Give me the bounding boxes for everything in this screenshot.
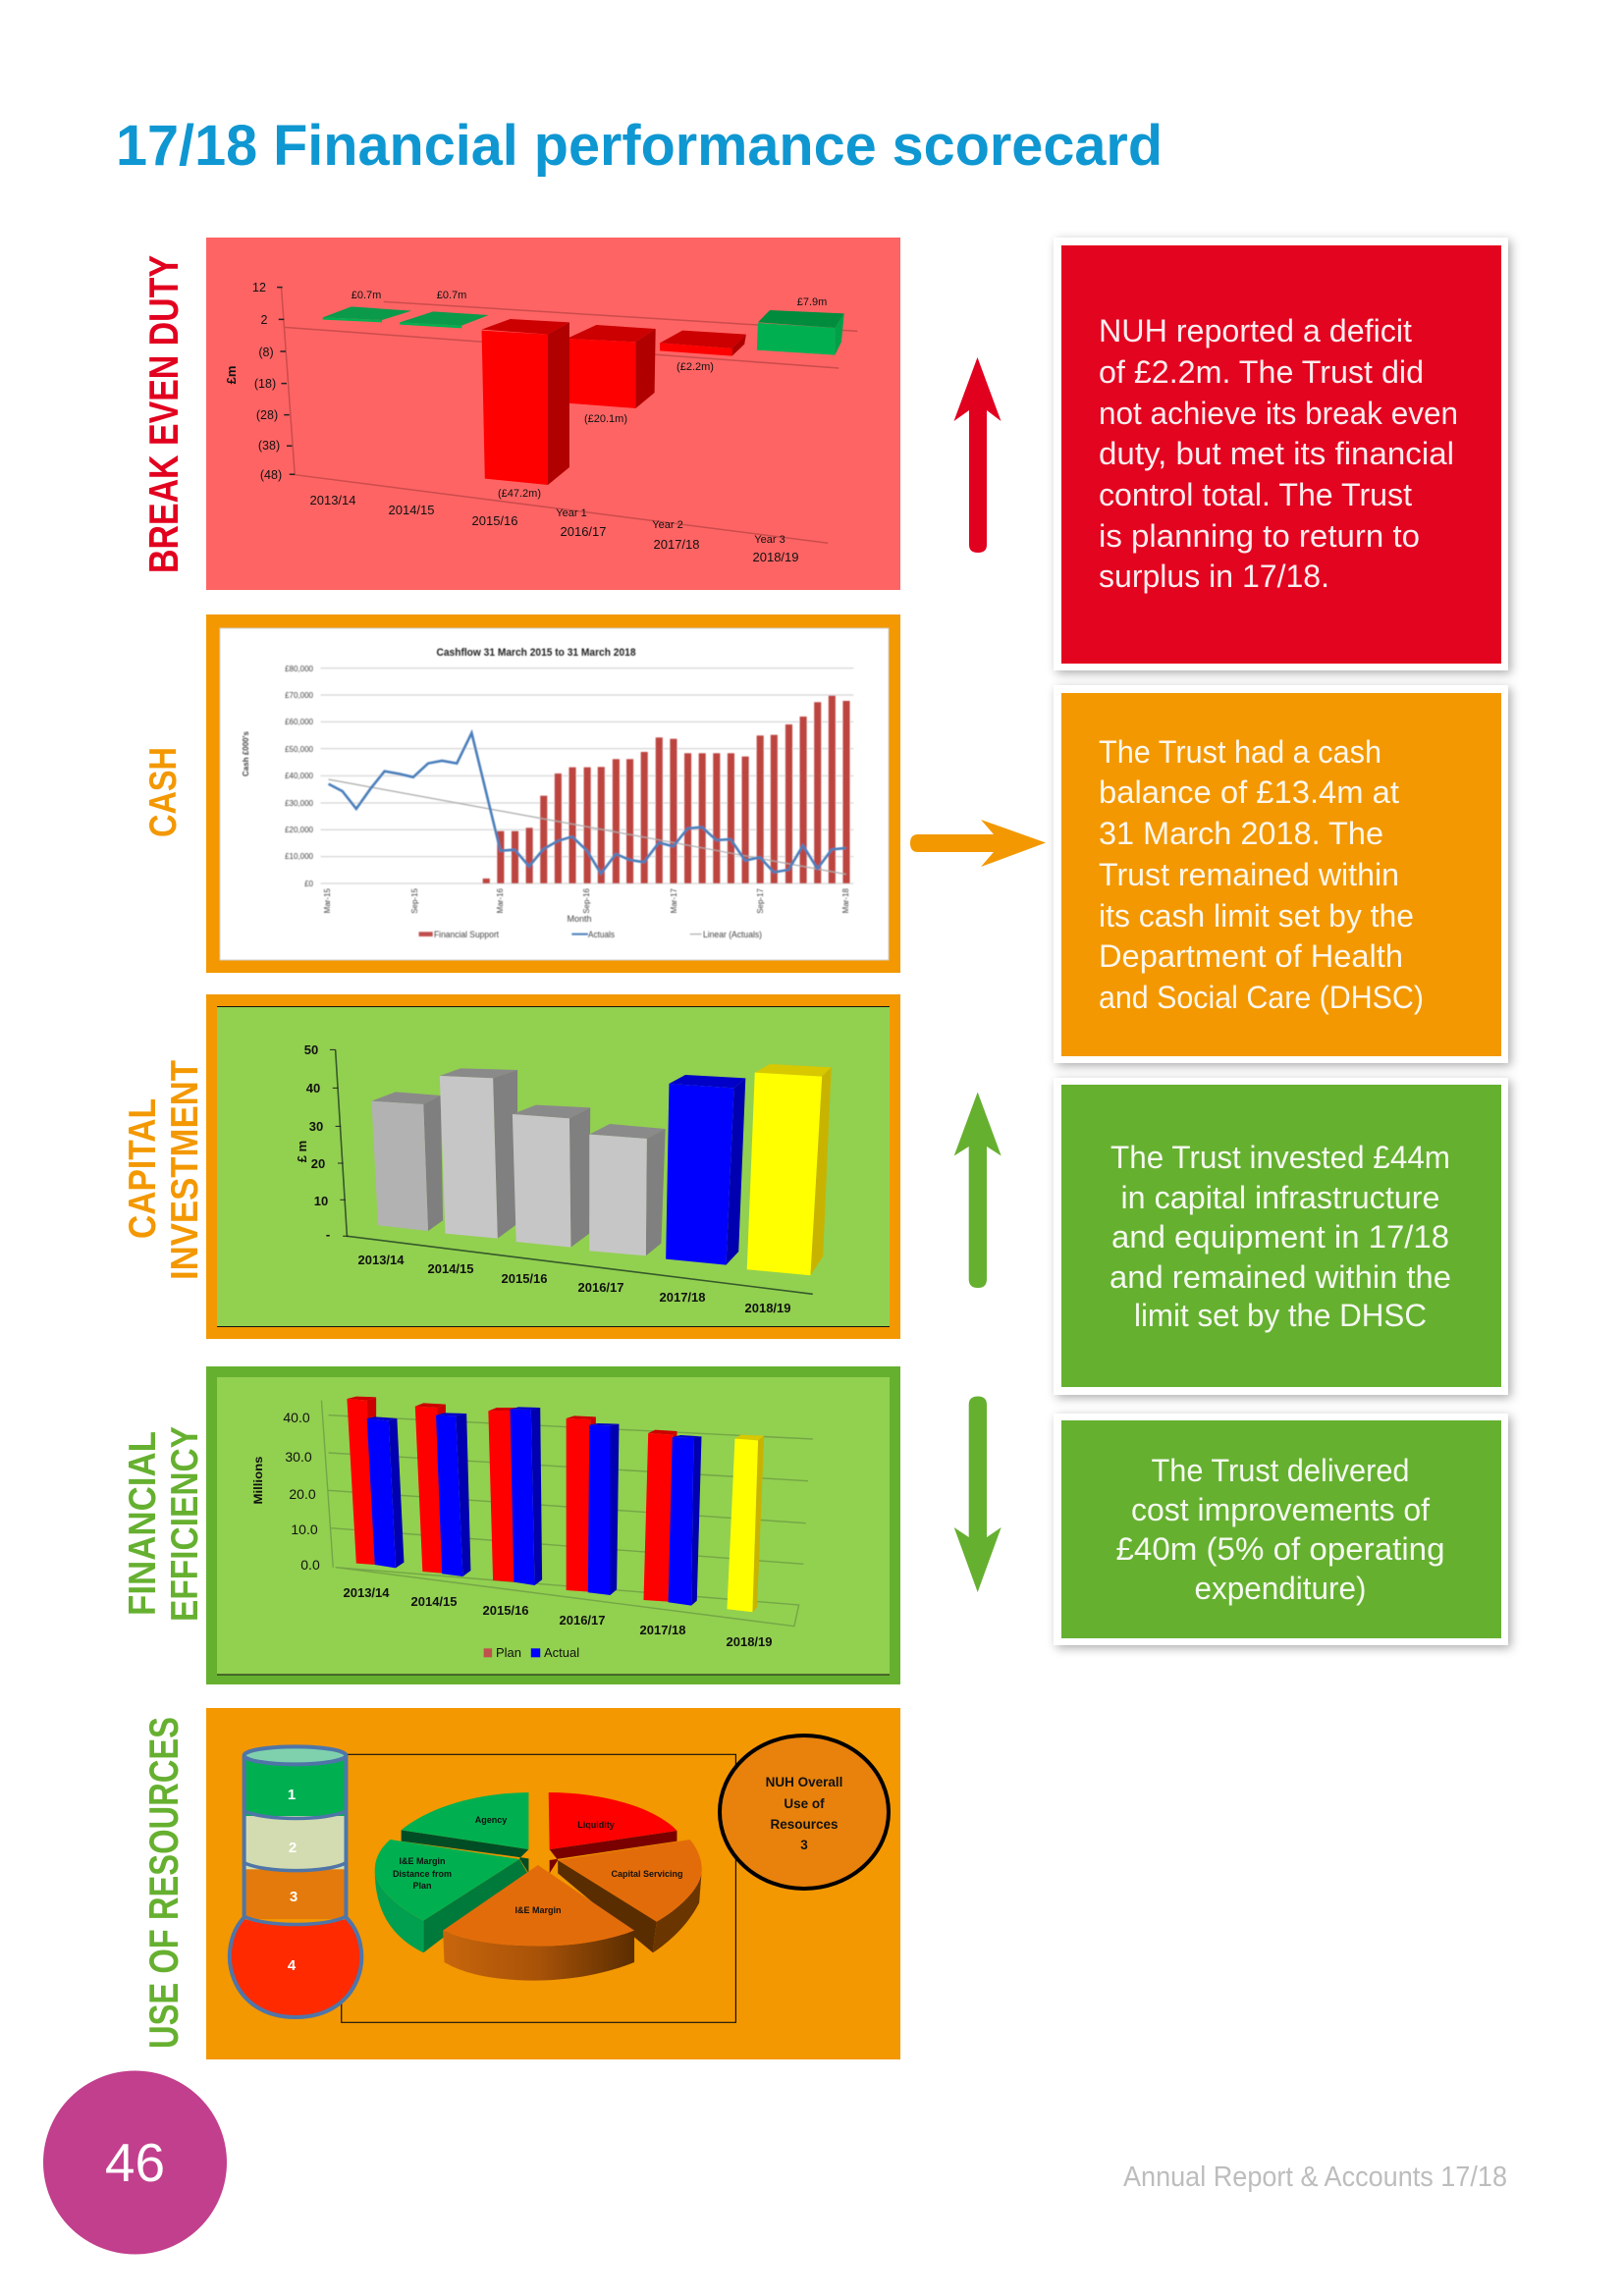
card: break even: not achieve its break even <box>1099 396 1458 431</box>
axis labels: capital: 40 <box>306 1081 320 1095</box>
axis and data labels: break even: Year 2 <box>652 519 683 531</box>
axis labels: efficiency: Millions <box>253 1457 265 1504</box>
heading: capital investment: CAPITAL <box>122 1098 164 1239</box>
pie labels: Agency <box>475 1815 507 1825</box>
3D bar chart: efficiency <box>321 1397 813 1657</box>
combo chart: cashflow: £70,000 <box>285 691 314 700</box>
axis labels: efficiency: Actual <box>544 1645 579 1660</box>
card: cash: its cash limit set by the <box>1099 898 1414 934</box>
combo chart: cashflow: Cash £000's <box>242 730 250 776</box>
combo chart: cashflow: £10,000 <box>285 852 314 861</box>
axis labels: efficiency: 2014/15 <box>410 1594 458 1609</box>
card: cash: balance of £13.4m at <box>1099 774 1399 810</box>
axis and data labels: break even: (18) <box>254 377 276 391</box>
axis and data labels: break even: 2016/17 <box>560 524 607 539</box>
axis and data labels: break even: £0.7m <box>352 290 381 301</box>
card: capital investment <box>1054 1078 1508 1395</box>
axis and data labels: break even: (£2.2m) <box>677 361 714 373</box>
axis labels: efficiency: 30.0 <box>285 1449 312 1465</box>
axis labels: capital: 2016/17 <box>577 1280 624 1295</box>
card: financial efficiency: expenditure) <box>1194 1571 1367 1606</box>
axis and data labels: break even: (£47.2m) <box>498 488 541 500</box>
axis labels: efficiency: 2016/17 <box>560 1613 605 1628</box>
axis labels: capital: 20 <box>311 1156 325 1171</box>
callout: NUH overall use of resources: Use of <box>784 1796 825 1811</box>
axis and data labels: break even: 2013/14 <box>310 493 355 507</box>
axis labels: efficiency: 2015/16 <box>483 1603 528 1618</box>
axis labels: capital: £ m <box>295 1141 309 1162</box>
axis labels: efficiency: Plan <box>496 1645 521 1660</box>
combo chart: cashflow: £30,000 <box>285 799 314 808</box>
card: capital investment: limit set by the DHSC <box>1134 1298 1427 1333</box>
heading: capital investment <box>122 1060 206 1280</box>
combo chart: cashflow: Actuals <box>588 930 615 939</box>
pie labels: Liquidity <box>577 1820 615 1830</box>
axis labels: capital: 2017/18 <box>660 1290 705 1305</box>
axis and data labels: break even: £7.9m <box>797 296 827 308</box>
combo chart: cashflow: Sep-17 <box>756 887 765 914</box>
axis labels: efficiency: 2013/14 <box>344 1585 390 1600</box>
axis and data labels: break even: (£20.1m) <box>584 413 627 425</box>
page number badge: 46 <box>105 2132 165 2193</box>
axis labels: efficiency: 40.0 <box>283 1410 310 1425</box>
3D bar chart: break even <box>277 288 857 543</box>
axis and data labels: break even: 12 <box>252 281 266 294</box>
combo chart: cashflow: £60,000 <box>285 718 314 726</box>
combo chart: cashflow: Sep-16 <box>582 887 591 914</box>
callout: NUH overall use of resources: NUH Overall <box>766 1775 842 1789</box>
card: capital investment: and equipment in 17/18 <box>1111 1219 1449 1255</box>
combo chart: cashflow: Mar-16 <box>496 887 505 913</box>
pie labels: I&E Margin <box>399 1856 446 1866</box>
thermometer labels: 4 <box>288 1957 297 1974</box>
arrow: green down <box>954 1396 1001 1592</box>
thermometer labels: 2 <box>289 1840 297 1856</box>
axis and data labels: break even <box>224 281 827 564</box>
heading: financial efficiency: FINANCIAL <box>122 1431 164 1616</box>
combo chart: cashflow: £20,000 <box>285 826 314 834</box>
card: capital investment: and remained within the <box>1110 1259 1451 1295</box>
heading: capital investment: INVESTMENT <box>164 1060 206 1280</box>
card: cash: Trust remained within <box>1099 857 1399 892</box>
axis labels: efficiency: 2017/18 <box>640 1623 685 1637</box>
axis and data labels: break even: Year 3 <box>754 534 785 546</box>
card: cash: The Trust had a cash <box>1099 734 1381 770</box>
axis and data labels: break even: (28) <box>256 408 278 422</box>
pie labels: Capital Servicing <box>611 1869 683 1879</box>
combo chart: cashflow: Mar-18 <box>841 887 850 913</box>
thermometer labels: 1 <box>288 1787 296 1803</box>
combo chart: cashflow: Cashflow 31 March 2015 to 31 March 2018 <box>436 647 636 659</box>
card: break even: is planning to return to <box>1099 518 1420 554</box>
axis labels: efficiency <box>253 1410 772 1660</box>
combo chart: cashflow: £0 <box>304 880 314 888</box>
card: cash: and Social Care (DHSC) <box>1099 980 1424 1015</box>
combo chart: cashflow: Mar-15 <box>323 887 332 913</box>
axis labels: capital: 2014/15 <box>428 1261 473 1276</box>
combo chart: cashflow: Financial Support <box>434 930 499 939</box>
card: financial efficiency: cost improvements of <box>1131 1492 1430 1527</box>
axis labels: capital: - <box>326 1227 330 1242</box>
axis labels: capital: 10 <box>314 1194 328 1208</box>
heading: financial efficiency: EFFICIENCY <box>164 1426 206 1622</box>
card: break even: of £2.2m. The Trust did <box>1099 354 1424 390</box>
axis labels: capital: 30 <box>309 1119 323 1134</box>
heading: break even duty: BREAK EVEN DUTY <box>140 255 187 573</box>
axis and data labels: break even: 2018/19 <box>752 550 799 564</box>
axis and data labels: break even: (8) <box>258 346 274 359</box>
thermometer and pie chart <box>230 1746 735 2022</box>
axis and data labels: break even: £m <box>224 366 239 384</box>
axis labels: capital: 2018/19 <box>744 1301 791 1315</box>
combo chart: cashflow <box>242 647 853 939</box>
card: break even: control total. The Trust <box>1099 477 1412 512</box>
axis and data labels: break even: (48) <box>260 468 282 482</box>
panel: use of resources <box>206 1708 900 2059</box>
callout: NUH overall use of resources <box>720 1735 889 1889</box>
axis and data labels: break even: 2015/16 <box>471 513 518 528</box>
card: break even <box>1054 238 1508 670</box>
heading: use of resources: USE OF RESOURCES <box>140 1717 187 2049</box>
panel: cash chart <box>206 614 900 973</box>
title: 17/18 Financial performance scorecard <box>116 114 1163 178</box>
panel: financial efficiency chart <box>206 1366 900 1684</box>
card: financial efficiency <box>1054 1414 1508 1645</box>
card: capital investment: in capital infrastructure <box>1121 1180 1439 1215</box>
footer: Annual Report & Accounts 17/18 <box>1123 2162 1507 2193</box>
axis labels: capital <box>295 1042 791 1315</box>
axis labels: capital: 2015/16 <box>501 1271 548 1286</box>
panel: break even chart <box>206 238 900 590</box>
card: financial efficiency: The Trust delivered <box>1151 1453 1410 1488</box>
page number badge <box>43 2071 227 2254</box>
card: cash: Department of Health <box>1099 938 1403 974</box>
card: break even: NUH reported a deficit <box>1099 313 1412 348</box>
card: cash: 31 March 2018. The <box>1099 816 1383 851</box>
pie labels <box>393 1815 683 1915</box>
card: capital investment: The Trust invested £44m <box>1110 1140 1450 1175</box>
card: break even: duty, but met its financial <box>1099 436 1454 471</box>
axis labels: efficiency: 0.0 <box>300 1557 320 1573</box>
axis labels: efficiency: 20.0 <box>289 1486 316 1502</box>
combo chart: cashflow: £40,000 <box>285 772 314 780</box>
arrow: red up <box>954 357 1001 553</box>
axis and data labels: break even: £0.7m <box>437 290 466 301</box>
axis and data labels: break even: 2017/18 <box>654 537 699 552</box>
3D bar chart: capital <box>330 1049 832 1294</box>
axis labels: efficiency: 2018/19 <box>727 1634 772 1649</box>
combo chart: cashflow: Mar-17 <box>670 887 678 913</box>
thermometer labels <box>288 1787 298 1974</box>
panel: capital investment chart <box>206 994 900 1339</box>
callout: NUH overall use of resources: 3 <box>800 1838 808 1852</box>
axis and data labels: break even: Year 1 <box>556 507 587 519</box>
combo chart: cashflow: £50,000 <box>285 745 314 754</box>
thermometer labels: 3 <box>290 1889 298 1905</box>
heading: cash: CASH <box>142 747 185 837</box>
pie labels: Plan <box>412 1881 432 1891</box>
axis and data labels: break even: 2014/15 <box>389 503 434 517</box>
combo chart: cashflow: £80,000 <box>285 665 314 673</box>
combo chart: cashflow: Month <box>567 914 592 924</box>
card: financial efficiency: £40m (5% of operating <box>1115 1531 1445 1567</box>
pie labels: Distance from <box>393 1869 452 1879</box>
axis labels: capital: 50 <box>304 1042 318 1057</box>
card: cash <box>1054 685 1508 1063</box>
combo chart: cashflow: Sep-15 <box>410 887 419 914</box>
callout: NUH overall use of resources: Resources <box>770 1817 839 1832</box>
heading: financial efficiency <box>122 1426 206 1622</box>
arrow: green up <box>954 1092 1001 1288</box>
arrow: orange right <box>910 820 1046 867</box>
axis and data labels: break even: 2 <box>261 313 268 327</box>
pie labels: I&E Margin <box>514 1905 562 1915</box>
combo chart: cashflow: Linear (Actuals) <box>703 930 762 939</box>
axis and data labels: break even: (38) <box>258 439 280 453</box>
axis labels: efficiency: 10.0 <box>291 1522 318 1537</box>
axis labels: capital: 2013/14 <box>357 1253 405 1267</box>
card: break even: surplus in 17/18. <box>1099 559 1329 594</box>
